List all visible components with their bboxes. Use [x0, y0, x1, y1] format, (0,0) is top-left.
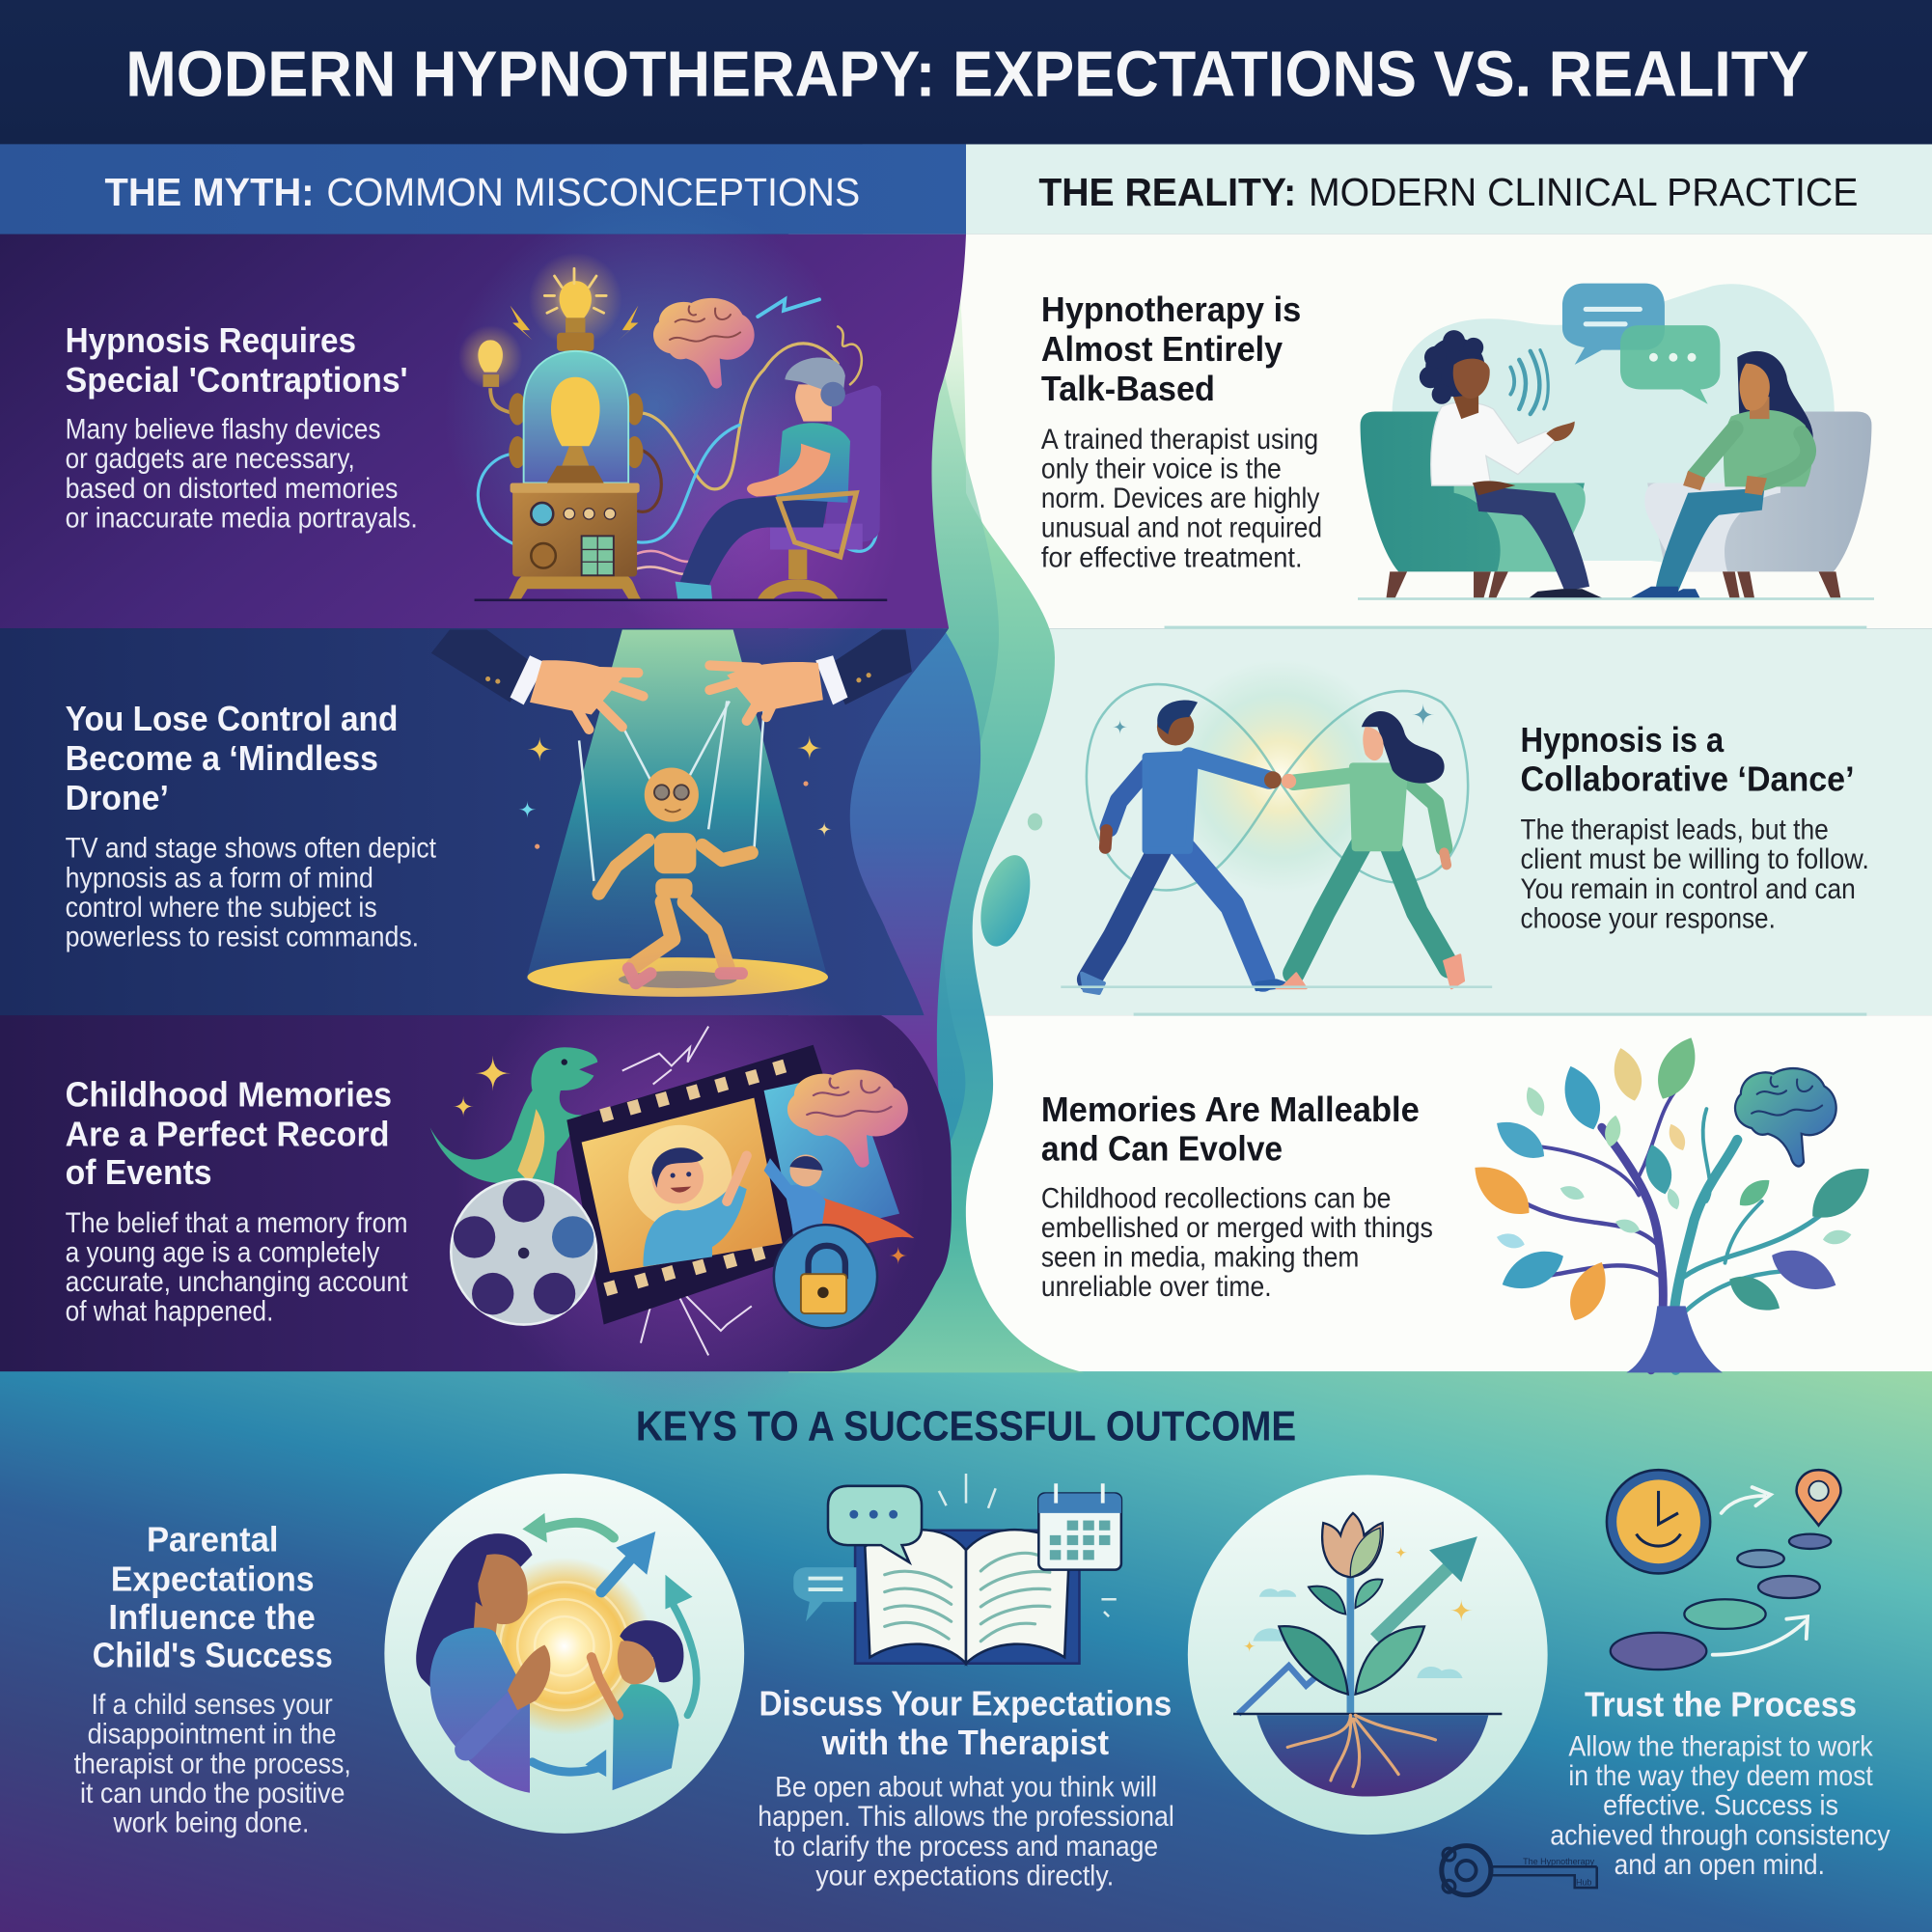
text block: myth 1: Special 'Contraptions' [66, 361, 408, 400]
heading bar: the reality: THE REALITY: [1038, 170, 1296, 214]
heading: keys to a successful outcome: KEYS TO A SUCCESSFUL OUTCOME [636, 1404, 1296, 1450]
text block: reality 2: choose your response. [1521, 902, 1776, 934]
text block: parental expectations: Child's Success [93, 1636, 333, 1674]
icon: therapist figure [1420, 330, 1604, 599]
circle illustration: parent and child [384, 1474, 744, 1834]
icon: film reel [451, 1179, 596, 1325]
icon: soil and roots [1233, 1714, 1502, 1797]
icon: clouds [1253, 1588, 1463, 1678]
icon: film strip sprocket holes [599, 1060, 787, 1296]
icon: inner bulb [547, 377, 604, 483]
text block: reality 1: A trained therapist using [1041, 424, 1318, 455]
text block: parental expectations: Influence the [108, 1598, 316, 1637]
icon: sparkles [519, 735, 832, 849]
panel: keys background [0, 1371, 1932, 1932]
text block: reality 2: client must be willing to follow. [1521, 843, 1869, 875]
icon: small blue bubble [793, 1567, 856, 1621]
title: MODERN HYPNOTHERAPY: EXPECTATIONS VS. REALITY [125, 40, 1808, 111]
icon: left armchair [1361, 411, 1586, 599]
text block: reality 1: Hypnotherapy is [1041, 290, 1301, 329]
icon: blue speech bubble [1562, 284, 1665, 365]
text block: discuss your expectations: your expectations directly. [815, 1860, 1114, 1891]
text block: parental expectations: disappointment in the [88, 1719, 337, 1751]
text block: reality 1: Talk-Based [1041, 370, 1215, 408]
text block: parental expectations: therapist or the process, [74, 1748, 351, 1780]
text block: reality 2: Hypnosis is a [1521, 721, 1725, 759]
spotlight beam [526, 629, 828, 980]
icon: right puppeteer hand [709, 629, 912, 721]
icon: sparkles [1243, 1546, 1473, 1652]
text block: myth 1 [66, 321, 418, 534]
text block: reality 3: seen in media, making them [1041, 1242, 1359, 1274]
panel: myth 3 background [0, 1015, 952, 1371]
infinity loop [1087, 684, 1468, 891]
icon: side film frame [764, 1072, 899, 1238]
panel: myth 2 background [0, 628, 949, 1015]
heading bar: the reality: MODERN CLINICAL PRACTICE [1309, 170, 1858, 214]
text block: trust the process: and an open mind. [1615, 1849, 1825, 1881]
text block: myth 3: Childhood Memories [66, 1076, 392, 1115]
text block: discuss your expectations: Discuss Your Expectations [759, 1684, 1172, 1723]
icon: key logo with brand name: Hub [1576, 1877, 1591, 1887]
illustration: puppet under spotlight [431, 629, 912, 997]
text block: myth 2: control where the subject is [66, 892, 377, 924]
icon: child [592, 1620, 683, 1790]
icon: lightning lines [622, 1027, 752, 1355]
heading bar: the myth [0, 144, 966, 235]
text block: myth 3: a young age is a completely [66, 1236, 380, 1268]
icon: white arrows [1713, 1487, 1808, 1655]
icon: mother [416, 1533, 550, 1793]
icon: growth arrow [1375, 1536, 1477, 1639]
text block: reality 3: embellished or merged with things [1041, 1212, 1433, 1244]
text block: trust the process: Allow the therapist to work [1568, 1730, 1873, 1762]
icon: superhero [764, 1154, 914, 1247]
text block: myth 2: hypnosis as a form of mind [66, 862, 373, 894]
text block: reality 2: Collaborative ‘Dance’ [1521, 760, 1855, 799]
text block: reality 1 [1041, 290, 1322, 573]
illustration: contraption machine and seated person [444, 197, 899, 677]
icon: lightning bolts [511, 306, 638, 342]
icon: glass dome [524, 351, 628, 483]
icon: side bulb [478, 340, 515, 414]
text block: discuss your expectations: happen. This allows the professional [758, 1801, 1174, 1833]
text block: myth 2 [66, 700, 436, 953]
puppet strings [579, 701, 764, 881]
icon: arrows [522, 1513, 697, 1777]
illustration: collaborative dance [972, 659, 1492, 993]
icon: padlock [774, 1225, 877, 1328]
text block: myth 3: Are a Perfect Record [66, 1115, 389, 1153]
text block: trust the process [1550, 1686, 1891, 1881]
icon: brain [787, 1069, 908, 1168]
icon: smiling clock [1607, 1470, 1710, 1573]
icon: green speech bubble [1620, 325, 1720, 404]
icon: man dancing [1082, 700, 1291, 993]
text block: myth 3: The belief that a memory from [66, 1207, 408, 1239]
icon: location pin [1797, 1470, 1841, 1526]
icon: chair [758, 385, 881, 599]
text block: reality 1: unusual and not required [1041, 512, 1322, 544]
icon: puppet [599, 767, 752, 983]
icon: left puppeteer hand [431, 629, 643, 730]
icon: floating brain [653, 298, 755, 389]
tree leaves [1464, 1031, 1880, 1327]
heading bar: the reality [1038, 170, 1858, 214]
wave divider between myth and reality [788, 235, 1085, 1372]
text block: reality 3: Memories Are Malleable [1041, 1090, 1420, 1129]
text block: myth 3: of what happened. [66, 1296, 273, 1328]
text block: myth 3 [66, 1076, 408, 1328]
illustration: clock, stepping stones and pin [1607, 1470, 1841, 1670]
text block: reality 3: and Can Evolve [1041, 1130, 1283, 1169]
panel: right column backgrounds [863, 144, 1932, 1372]
heading bar: the myth: THE MYTH: [105, 170, 315, 214]
text block: trust the process: effective. Success is [1603, 1790, 1838, 1822]
text block: parental expectations: work being done. [113, 1808, 309, 1839]
text block: myth 1: Many believe flashy devices [66, 414, 381, 446]
text block: myth 1: Hypnosis Requires [66, 321, 356, 360]
text block: reality 3 [1041, 1090, 1433, 1303]
text block: reality 3: unreliable over time. [1041, 1271, 1272, 1303]
text block: parental expectations: it can undo the positive [80, 1778, 345, 1809]
icon: right armchair [1644, 411, 1871, 599]
text block: myth 2: Become a ‘Mindless [66, 739, 378, 778]
text block: discuss your expectations: Be open about what you think will [775, 1772, 1157, 1804]
spotlight pool [527, 957, 828, 997]
icon: key logo with brand name: The Hypnotherapy [1523, 1857, 1595, 1866]
icon: calendar [1038, 1483, 1121, 1570]
icon: open book [855, 1530, 1079, 1664]
icon: film strip [566, 1045, 875, 1325]
icon: small rays [939, 1474, 1117, 1616]
text block: myth 1: based on distorted memories [66, 473, 398, 505]
text block: trust the process: in the way they deem most [1568, 1760, 1873, 1792]
icon: top bulb [544, 268, 606, 351]
icon: teal chat bubble [828, 1486, 922, 1562]
text block: reality 2: You remain in control and can [1521, 873, 1856, 905]
text block: myth 2: Drone’ [66, 779, 169, 817]
text block: reality 1: only their voice is the [1041, 453, 1282, 484]
illustration: therapist and client talking [1358, 284, 1874, 600]
icon: sparkles [1113, 704, 1434, 734]
circle illustration: growing plant [1188, 1475, 1548, 1835]
text block: myth 1: or gadgets are necessary, [66, 443, 355, 475]
text block: parental expectations: Parental [147, 1520, 279, 1559]
icon: cabinet [509, 483, 641, 599]
text block: myth 2: powerless to resist commands. [66, 922, 419, 953]
icon: zigzag trend line [1238, 1666, 1328, 1714]
text block: trust the process: achieved through consistency [1550, 1819, 1891, 1851]
background blob [1393, 284, 1835, 564]
text block: parental expectations: If a child senses your [91, 1689, 333, 1721]
panel: myth 1 background [0, 235, 966, 628]
icon: sound waves [1510, 350, 1548, 414]
heading bar: the myth: COMMON MISCONCEPTIONS [326, 170, 860, 214]
text block: trust the process: Trust the Process [1585, 1686, 1857, 1725]
illustration: film strip memory collage [430, 949, 925, 1417]
text block: discuss your expectations [758, 1684, 1174, 1891]
icon: woman dancing [1277, 711, 1464, 988]
text block: myth 2: TV and stage shows often depict [66, 833, 436, 865]
icon: sparkles [453, 1056, 907, 1265]
icon: client figure [1629, 351, 1813, 599]
text block: discuss your expectations: to clarify the process and manage [774, 1831, 1158, 1863]
header band [0, 0, 1932, 144]
text block: reality 2: The therapist leads, but the [1521, 814, 1829, 845]
text block: reality 2 [1521, 721, 1869, 934]
text block: discuss your expectations: with the Therapist [821, 1724, 1109, 1762]
text block: myth 3: accurate, unchanging account [66, 1266, 408, 1298]
text block: myth 3: of Events [66, 1153, 212, 1192]
icon: key logo with brand name [1442, 1846, 1597, 1895]
icon: knobs [509, 393, 643, 468]
icon: wires [478, 299, 877, 574]
icon: dinosaur [430, 1047, 597, 1201]
text block: reality 1: Almost Entirely [1041, 330, 1283, 369]
icon: stepping stones [1611, 1534, 1831, 1670]
illustration: book, speech bubbles and calendar [793, 1474, 1121, 1664]
tree trunk and branches [1522, 1090, 1830, 1372]
text block: myth 1: or inaccurate media portrayals. [66, 502, 418, 534]
icon: seated person [676, 358, 856, 599]
icon: brain [1735, 1068, 1836, 1167]
text block: reality 1: for effective treatment. [1041, 541, 1303, 573]
icon: main film frame with boy [582, 1098, 783, 1273]
text block: parental expectations: Expectations [111, 1559, 315, 1598]
illustration: memory tree [1464, 1031, 1880, 1372]
icon: plant with flower [1279, 1513, 1424, 1713]
icon: floating blobs [972, 814, 1042, 952]
glow [476, 1558, 653, 1735]
text block: reality 3: Childhood recollections can be [1041, 1182, 1391, 1214]
text block: parental expectations [74, 1520, 351, 1839]
text block: reality 1: norm. Devices are highly [1041, 483, 1320, 514]
text block: myth 2: You Lose Control and [66, 700, 398, 738]
